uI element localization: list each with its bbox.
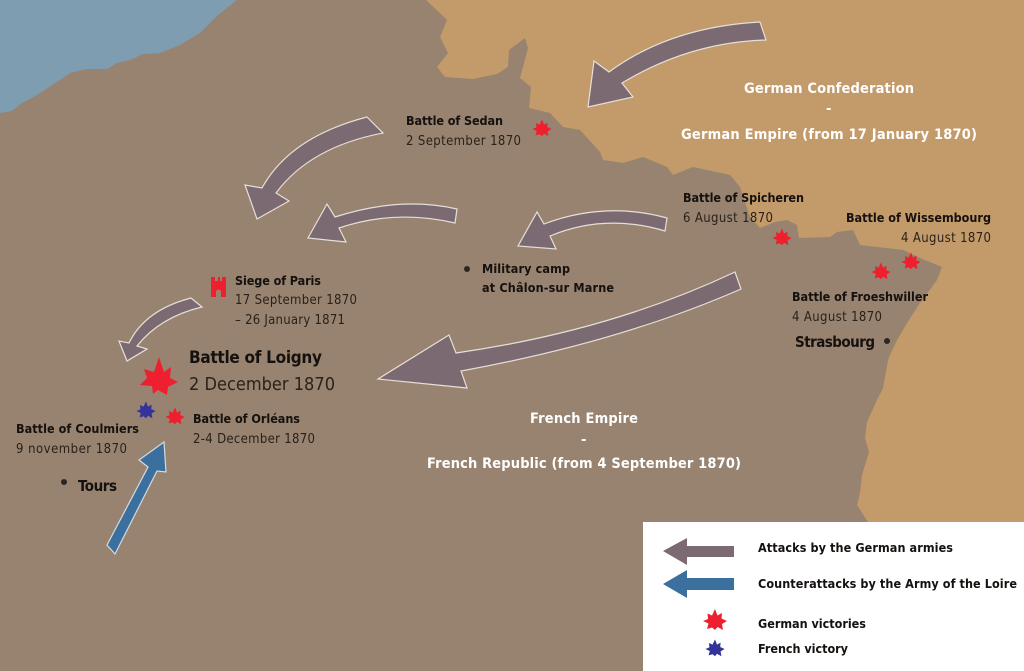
icon: Tours dot [61, 479, 67, 485]
icon: Sedan star [532, 119, 552, 136]
icon: legend blue star [705, 639, 725, 656]
label: Battle of Wissembourg [846, 210, 991, 246]
label: Military camp: Military camp [482, 261, 570, 276]
icon: Froeshwiller star [871, 262, 891, 279]
legend text: French victory: French victory [758, 641, 849, 656]
icon: Loigny star [140, 357, 178, 395]
label: German states: - [826, 101, 831, 117]
icon: Strasbourg dot [884, 338, 890, 344]
label: Battle of Loigny: 2 December 1870 [189, 374, 335, 395]
arrow: German attack into northern France [588, 22, 766, 107]
arrow: Army of the Loire counterattack [107, 442, 166, 554]
label: Siege of Paris: – 26 January 1871 [235, 313, 345, 328]
label: French states: - [581, 432, 586, 448]
label: German states: German Confederation [744, 81, 914, 97]
label: Battle of Coulmiers: Battle of Coulmiers [16, 421, 139, 436]
panel: legend [643, 522, 1024, 671]
label: Siege of Paris: 17 September 1870 [235, 293, 357, 308]
legend text: counterattacks: Counterattacks by the Army of the Loire [758, 576, 1017, 591]
label: Battle of Loigny [189, 348, 335, 395]
label: French states: French Republic (from 4 September 1870) [427, 456, 741, 472]
label: Battle of Orléans [193, 411, 315, 447]
icon: legend blue arrow [663, 570, 734, 598]
label: Strasbourg: Strasbourg [795, 333, 875, 351]
label: French states: French Empire [530, 411, 638, 427]
label: French states [427, 411, 741, 472]
label: Siege of Paris: Siege of Paris [235, 273, 321, 288]
label: Battle of Froeshwiller: 4 August 1870 [792, 310, 882, 325]
label: Battle of Sedan [406, 113, 521, 149]
label: Battle of Coulmiers: 9 november 1870 [16, 442, 127, 457]
icon: Wissembourg star [901, 252, 921, 269]
label: Battle of Sedan: Battle of Sedan [406, 113, 503, 128]
label: Military camp: at Châlon-sur Marne [482, 280, 614, 295]
panel: German territory [426, 0, 1024, 522]
arrow: Spicheren towards Châlon [518, 211, 667, 249]
label: Siege of Paris [235, 273, 357, 328]
arrow: Sedan towards Paris [245, 117, 383, 219]
label: Battle of Orléans: Battle of Orléans [193, 411, 300, 426]
icon: Orléans star [165, 407, 185, 424]
label: Battle of Orléans: 2-4 December 1870 [193, 432, 315, 447]
icon: Paris tower [211, 277, 226, 297]
label: Battle of Sedan: 2 September 1870 [406, 134, 521, 149]
arrow: Alsace towards the Loire [378, 272, 741, 388]
label: Battle of Wissembourg: 4 August 1870 [901, 231, 991, 246]
arrow: Châlon towards Paris [308, 204, 457, 242]
icon: Châlon dot [464, 266, 470, 272]
label: German states [681, 81, 977, 143]
label: Battle of Coulmiers [16, 421, 139, 457]
icon: legend red star [703, 609, 727, 630]
label: Battle of Froeshwiller [792, 289, 928, 325]
icon: Spicheren star [772, 228, 792, 245]
icon: legend grey arrow [663, 538, 734, 565]
icon: Coulmiers star [136, 401, 156, 418]
label: German states: German Empire (from 17 January 1870) [681, 127, 977, 143]
legend text: German attacks: Attacks by the German armies [758, 540, 953, 555]
label: Tours: Tours [78, 477, 117, 495]
label: Battle of Froeshwiller: Battle of Froeshwiller [792, 289, 928, 304]
arrow: Paris towards Loigny [119, 298, 202, 361]
legend text: German victories: German victories [758, 616, 866, 631]
label: Military camp [482, 261, 614, 295]
label: Battle of Spicheren [683, 190, 804, 226]
label: Battle of Spicheren: Battle of Spicheren [683, 190, 804, 205]
label: Battle of Loigny: Battle of Loigny [189, 348, 322, 368]
panel: sea [0, 0, 237, 113]
label: Battle of Spicheren: 6 August 1870 [683, 211, 773, 226]
label: Battle of Wissembourg: Battle of Wissembourg [846, 210, 991, 225]
